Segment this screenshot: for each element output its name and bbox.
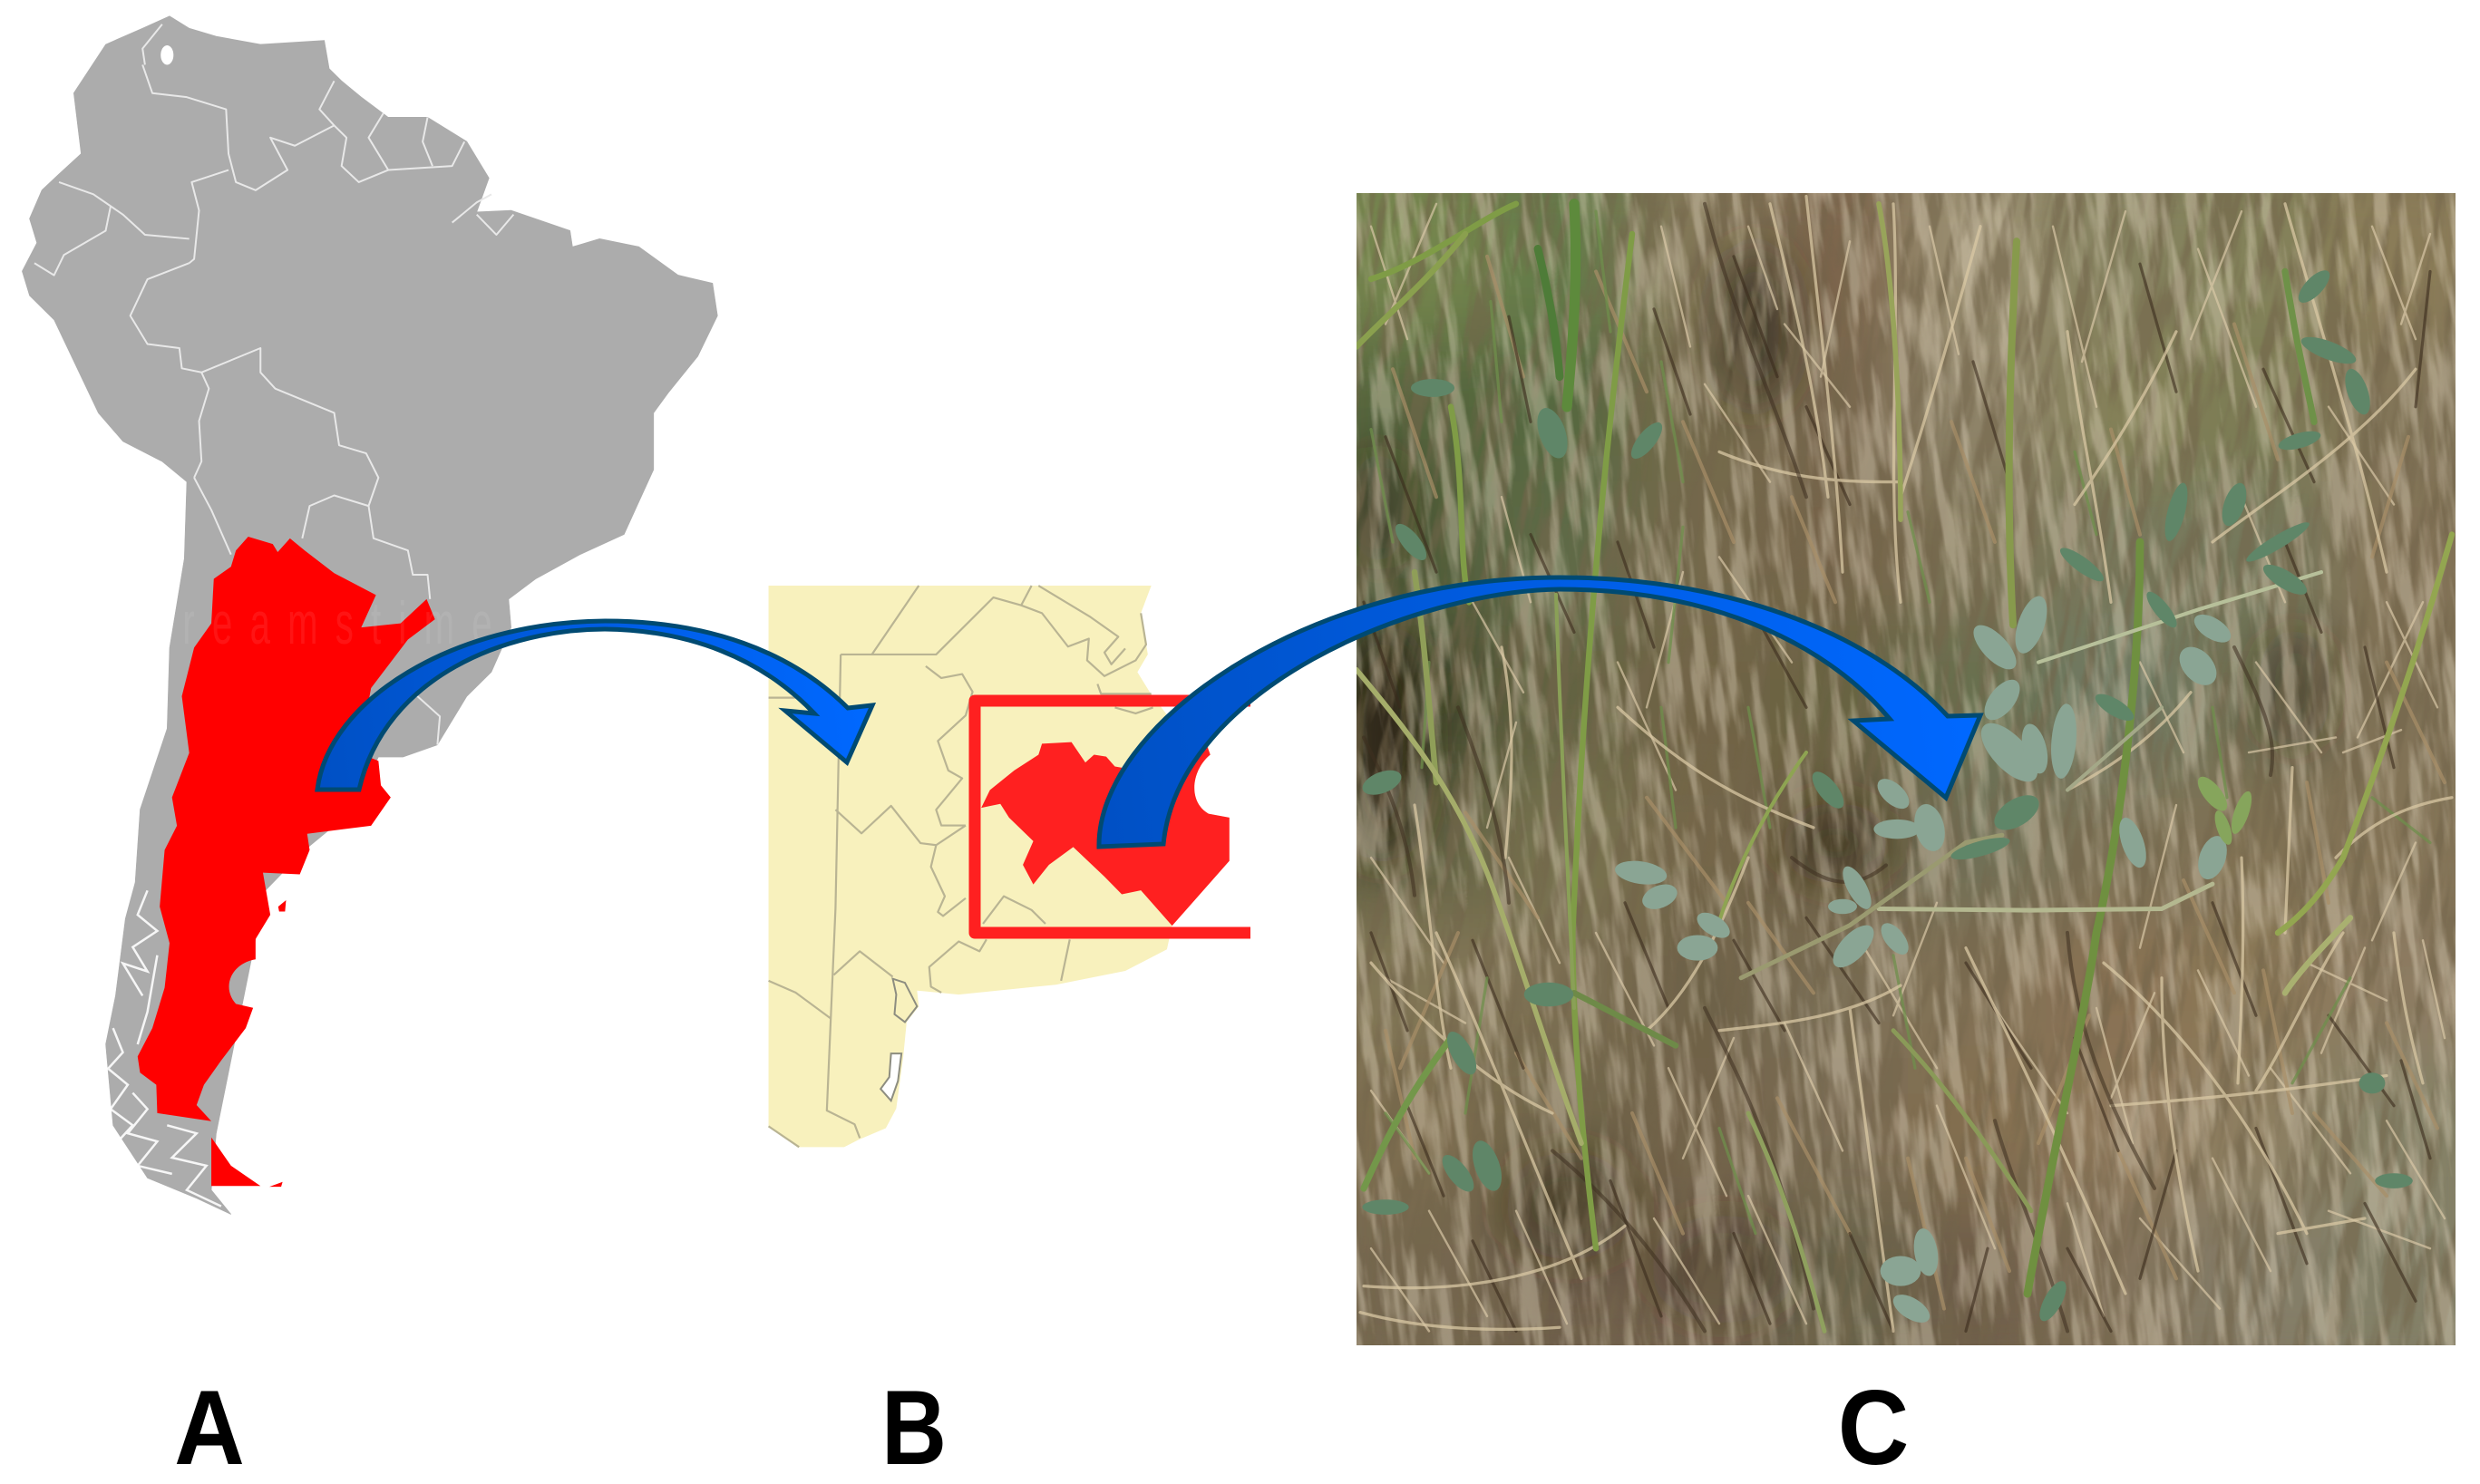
Argentina highlighted in red — [138, 537, 499, 1187]
photo base colours — [1357, 193, 2456, 1345]
panel B: Argentina detail map — [769, 586, 1250, 1147]
study area in red — [981, 731, 1230, 926]
label B: B — [881, 1369, 947, 1484]
label C: C — [1838, 1368, 1909, 1484]
plant leaves — [1359, 266, 2413, 1328]
arrow from A to B — [317, 621, 872, 790]
label A: A — [174, 1368, 245, 1484]
lake — [160, 45, 173, 64]
Chilean fjord fragments — [108, 890, 221, 1215]
province borders — [769, 586, 1153, 1147]
arrow from B to C — [1099, 577, 1980, 847]
South America landmass — [22, 16, 717, 1215]
fine straw strokes — [1371, 204, 2445, 1331]
dry grass texture — [1357, 193, 2456, 1345]
cream land area — [769, 586, 1230, 1147]
panel C: field photograph of plant — [1357, 193, 2456, 1345]
dark shadow patches — [1347, 245, 2330, 1324]
coastal islands detail — [880, 979, 917, 1101]
grass blades and stems — [1357, 197, 2452, 1331]
red selection box — [975, 701, 1250, 933]
watermark: dreamstime — [145, 590, 499, 656]
country borders — [34, 24, 513, 745]
panel A: South America map — [22, 16, 717, 1215]
